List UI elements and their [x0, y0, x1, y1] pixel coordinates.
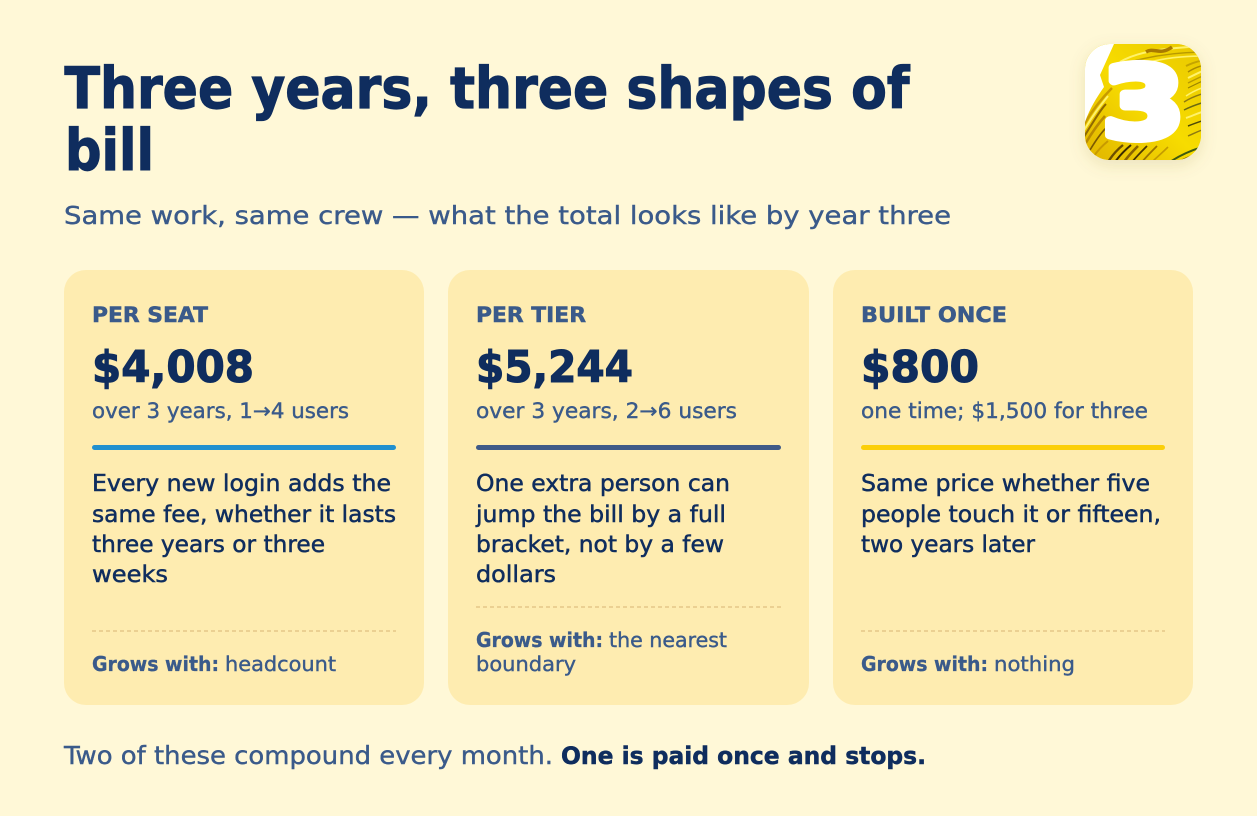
description: Same price whether five — [861, 471, 1150, 497]
description: jump the bill by a full — [475, 502, 726, 528]
title: bill — [65, 118, 154, 184]
accent bar: yellow — [861, 445, 1165, 450]
subtitle: Same work, same crew — what the total looks like by year three — [64, 201, 951, 230]
description: three years or three — [92, 532, 325, 558]
description: two years later — [861, 532, 1036, 558]
description: people touch it or fifteen, — [861, 502, 1161, 528]
accent bar: slate — [476, 445, 781, 450]
panel: per seat — [64, 270, 424, 705]
label: per tier: PER TIER — [476, 303, 586, 327]
label: per seat: PER SEAT — [92, 303, 209, 327]
panel: per tier — [448, 270, 809, 705]
price note: one time; $1,500 for three — [861, 399, 1148, 423]
description: Every new login adds the — [92, 471, 391, 497]
label: built once: BUILT ONCE — [861, 303, 1007, 327]
icon: yellow badge with number 3: 3 — [1102, 46, 1184, 161]
description: weeks — [92, 562, 168, 588]
grows with: the nearest boundary — [476, 628, 727, 676]
accent bar: blue — [92, 445, 396, 450]
grows with: headcount: headcount — [225, 652, 336, 676]
grows with: nothing: nothing — [994, 652, 1075, 676]
price note: over 3 years, 1→4 users — [92, 399, 349, 423]
price: $4,008: $4,008 — [92, 342, 254, 393]
description — [475, 471, 730, 588]
title: Three years, three shapes of — [64, 56, 911, 122]
description: One extra person can — [476, 471, 730, 497]
description: same fee, whether it lasts — [92, 502, 396, 528]
footer takeaway: One is paid once and stops. — [561, 742, 926, 770]
price note: over 3 years, 2→6 users — [476, 399, 737, 423]
price: $800: $800 — [861, 342, 979, 393]
grows with: the nearest boundary: the nearest — [609, 628, 727, 652]
panel: built once — [833, 270, 1193, 705]
description — [861, 471, 1161, 558]
title — [64, 56, 911, 184]
grows with: the nearest boundary: Grows with: — [476, 628, 603, 652]
grows with: nothing — [861, 652, 1075, 676]
footer takeaway — [63, 741, 926, 770]
grows with: nothing: Grows with: — [861, 652, 988, 676]
description — [92, 471, 396, 588]
grows with: headcount: Grows with: — [92, 652, 219, 676]
price: $5,244: $5,244 — [476, 342, 633, 393]
description: dollars — [476, 562, 556, 588]
description: bracket, not by a few — [476, 532, 724, 558]
footer takeaway: Two of these compound every month. — [63, 741, 553, 770]
grows with: the nearest boundary: boundary — [476, 652, 576, 676]
icon: yellow badge with number 3 — [1082, 44, 1205, 162]
grows with: headcount — [92, 652, 336, 676]
